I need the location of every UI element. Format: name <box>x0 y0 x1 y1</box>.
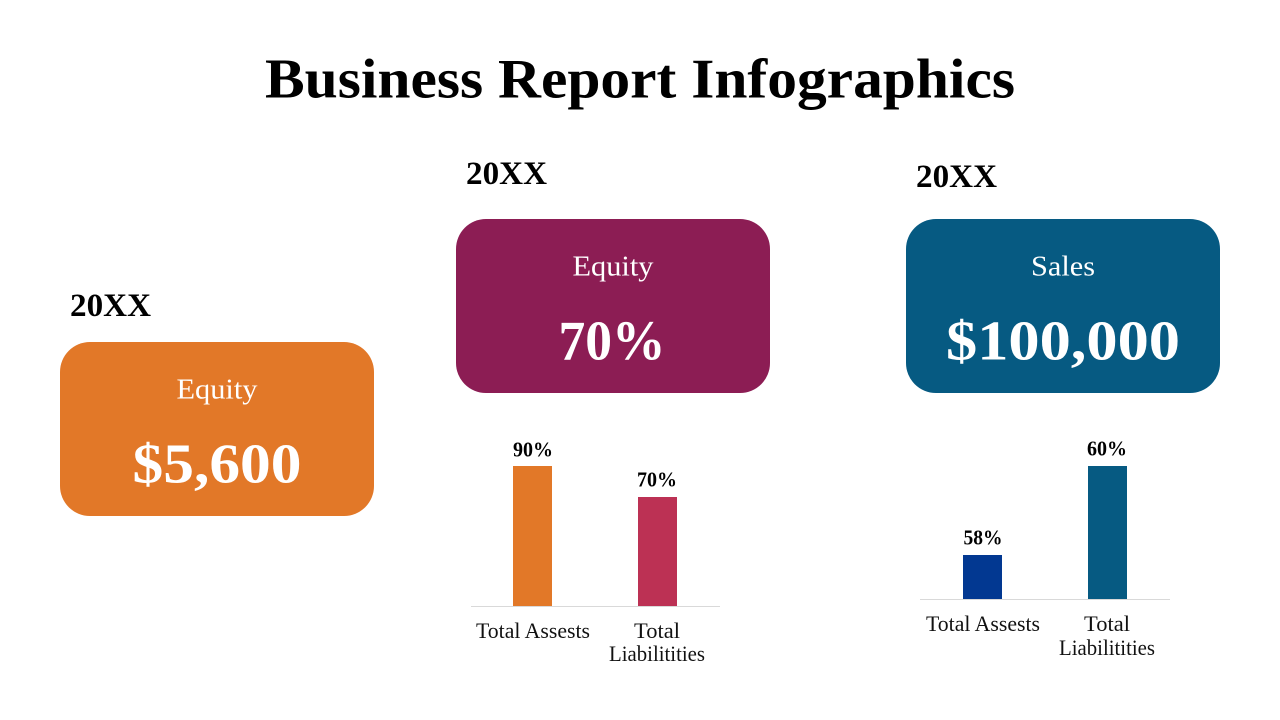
bar value: 70%: 70% <box>637 468 677 492</box>
card label: Sales: Sales <box>1031 250 1095 282</box>
title: Business Report Infographics <box>265 48 1015 110</box>
axis label: Total Liabilitities <box>609 618 705 666</box>
bar value: 90%: 90% <box>513 438 553 462</box>
year label: left: 20XX <box>70 288 151 324</box>
bar value: 60%: 60% <box>1087 436 1127 460</box>
axis label: Total Liabilitities: Total <box>1084 611 1130 636</box>
card: purple equity <box>456 219 770 393</box>
year label: right: 20XX <box>916 159 997 195</box>
axis label: Total Liabilitities: Liabilitities <box>609 641 705 666</box>
bar: total assets 58% <box>963 555 1002 599</box>
card label: Equity: Equity <box>176 374 258 406</box>
bar chart: right <box>920 436 1170 660</box>
bar chart: middle <box>471 438 720 666</box>
year label: middle: 20XX <box>466 156 547 192</box>
axis label: Total Assests: Total Assests <box>476 618 590 643</box>
bar value: 58%: 58% <box>964 526 1002 550</box>
card: blue sales <box>906 219 1220 393</box>
axis label: Total Liabilitities: Liabilitities <box>1059 635 1155 660</box>
card: orange equity <box>60 342 374 516</box>
panel: middle column 20XX equity percent <box>456 156 770 666</box>
card value: $100,000: $100,000 <box>946 310 1180 372</box>
axis label: Total Liabilitities: Total <box>634 618 680 643</box>
panel: left column 20XX equity value <box>60 288 374 516</box>
bar: total liabilities 70% <box>638 497 677 606</box>
axis label: Total Assests: Total Assests <box>926 611 1040 636</box>
card label: Equity: Equity <box>572 250 654 282</box>
bar: total liabilities 60% <box>1088 466 1127 599</box>
bar: total assets 90% <box>513 466 552 606</box>
panel: right column 20XX sales <box>906 159 1220 660</box>
card value: $5,600: $5,600 <box>132 434 302 496</box>
axis label: Total Liabilitities <box>1059 611 1155 660</box>
card value: 70%: 70% <box>558 310 666 372</box>
